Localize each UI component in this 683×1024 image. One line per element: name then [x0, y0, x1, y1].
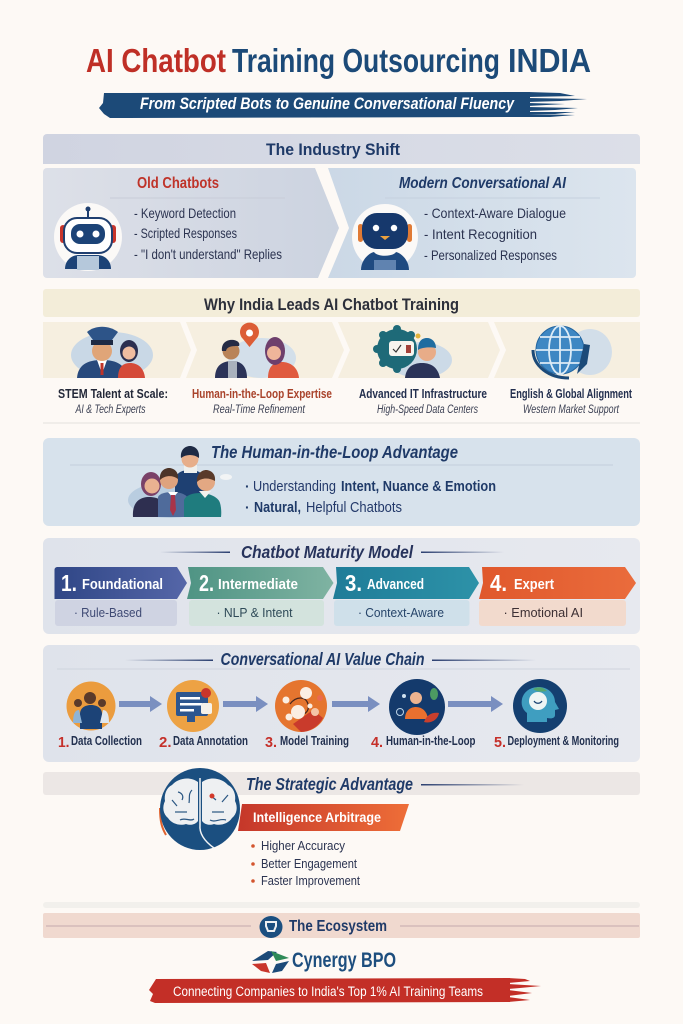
old chatbots column: [43, 168, 339, 278]
stage 1 foundational: · Rule-Based: [74, 605, 142, 620]
bullet list: Understanding: [253, 479, 336, 495]
feature labels: [58, 386, 632, 416]
step labels: 3.: [265, 734, 277, 751]
step labels: Model Training: [280, 734, 349, 748]
step labels: 2.: [159, 734, 172, 751]
icon: data collection: [66, 682, 116, 730]
step labels: Human-in-the-Loop: [386, 734, 476, 748]
icon: globe: [533, 326, 612, 378]
step labels: Deployment & Monitoring: [508, 734, 619, 748]
old chatbots column: - Keyword Detection: [134, 205, 236, 221]
feature labels: High-Speed Data Centers: [377, 404, 478, 416]
stage 4 expert: Expert: [514, 577, 554, 593]
bullet list: [245, 478, 496, 516]
modern conversational AI column: Modern Conversational AI: [399, 175, 567, 192]
panel: chatbot maturity model: [43, 538, 640, 634]
title: [86, 42, 591, 79]
step labels: 4.: [371, 734, 383, 751]
panel: the ecosystem: [43, 913, 640, 938]
step labels: Data Annotation: [173, 734, 248, 748]
icon: model training: [275, 680, 327, 732]
bullet list: advantages: [251, 838, 360, 888]
arrow 1: [119, 696, 162, 712]
stage 2 intermediate: Intermediate: [218, 577, 298, 593]
bullet list: ·: [245, 478, 250, 494]
stage 4 expert: · Emotional AI: [504, 605, 583, 620]
step labels: Data Collection: [71, 734, 142, 748]
icon: human in the loop: [215, 323, 299, 378]
subtitle ribbon: From Scripted Bots to Genuine Conversational Fluency: [140, 95, 515, 113]
logo: Cynergy BPO: Cynergy BPO: [292, 949, 396, 972]
intelligence arbitrage ribbon: Intelligence Arbitrage: [253, 809, 381, 825]
chevron row background: [43, 322, 640, 378]
heading: why india leads: [43, 289, 640, 317]
heading: value chain: Conversational AI Value Chain: [220, 649, 424, 669]
old chatbots column: - Scripted Responses: [134, 225, 237, 241]
title: INDIA: [508, 42, 591, 79]
modern conversational AI column: [328, 168, 636, 278]
bullet list: Helpful Chatbots: [306, 500, 402, 516]
step labels: 1.: [58, 734, 70, 751]
step labels: [58, 734, 619, 751]
bullet list: advantages: Better Engagement: [261, 856, 357, 871]
bullet list: advantages: Higher Accuracy: [261, 838, 345, 853]
feature labels: Real-Time Refinement: [213, 404, 306, 416]
icon: brain: [160, 768, 240, 850]
stage 1 foundational: Foundational: [82, 577, 163, 593]
stage 2 intermediate: 2.: [199, 570, 214, 596]
feature labels: Western Market Support: [523, 404, 620, 416]
bullet list: ·: [245, 499, 250, 515]
subtitle ribbon: [99, 92, 587, 118]
heading: why india leads: Why India Leads AI Chatbot Training: [204, 295, 459, 314]
panel: the industry shift: [43, 134, 640, 278]
panel: human in the loop advantage: [43, 438, 640, 526]
title: Training Outsourcing: [232, 42, 500, 79]
icon: team of people: [128, 446, 232, 518]
panel: why india leads: [43, 289, 640, 423]
stage 3 advanced: 3.: [345, 570, 362, 596]
heading: industry shift: The Industry Shift: [266, 140, 400, 159]
intelligence arbitrage ribbon: [238, 804, 409, 831]
stage 2 intermediate: · NLP & Intent: [216, 605, 293, 620]
heading: HITL advantage: The Human-in-the-Loop Advantage: [211, 442, 458, 462]
stage 4 expert: 4.: [490, 570, 507, 596]
stage 3 advanced: · Context-Aware: [358, 605, 444, 620]
icon: STEM talent: [71, 327, 153, 378]
stage 2 intermediate: [187, 567, 334, 626]
stage 1 foundational: [54, 567, 187, 626]
icon: human in the loop step: [389, 679, 445, 735]
panel: conversational AI value chain: [43, 645, 640, 762]
heading: strategic advantage: The Strategic Advantage: [246, 774, 413, 794]
stage 3 advanced: Advanced: [367, 577, 424, 593]
feature labels: Human-in-the-Loop Expertise: [192, 386, 332, 401]
heading: ecosystem: The Ecosystem: [289, 918, 387, 935]
feature labels: AI & Tech Experts: [75, 404, 146, 416]
arrow 2: [223, 696, 268, 712]
modern conversational AI column: - Context-Aware Dialogue: [424, 205, 566, 221]
icon: data annotation: [167, 680, 219, 732]
bullet list: advantages: Faster Improvement: [261, 873, 360, 888]
logo: Cynergy BPO: [252, 949, 396, 973]
bullet list: Natural,: [254, 500, 301, 516]
bottom ribbon: Connecting Companies to India's Top 1% AI Training Teams: [173, 984, 483, 999]
old chatbots column: Old Chatbots: [137, 175, 219, 192]
modern conversational AI column: - Personalized Responses: [424, 247, 557, 263]
icon: IT infrastructure: [373, 325, 452, 378]
feature labels: Advanced IT Infrastructure: [359, 386, 487, 401]
arrow 3: [332, 696, 380, 712]
feature labels: English & Global Alignment: [510, 386, 632, 401]
modern conversational AI column: - Intent Recognition: [424, 226, 537, 242]
stage 1 foundational: 1.: [61, 570, 77, 596]
heading: maturity model: Chatbot Maturity Model: [241, 542, 414, 562]
stage 3 advanced: [333, 567, 479, 626]
arrow 4: [448, 696, 503, 712]
step labels: 5.: [494, 734, 506, 751]
bottom ribbon: [149, 978, 541, 1003]
icon: deployment and monitoring: [513, 679, 567, 733]
stage 4 expert: [479, 567, 636, 626]
old chatbots column: - "I don't understand" Replies: [134, 246, 282, 262]
icon: old robot: [54, 203, 122, 271]
title: AI Chatbot: [86, 42, 226, 79]
icon: ecosystem: [260, 916, 282, 938]
bullet list: Intent, Nuance & Emotion: [341, 479, 496, 495]
icon: modern robot: [352, 204, 418, 270]
panel: the strategic advantage: [43, 768, 640, 888]
heading: industry shift: [43, 134, 640, 164]
feature labels: STEM Talent at Scale:: [58, 386, 168, 401]
